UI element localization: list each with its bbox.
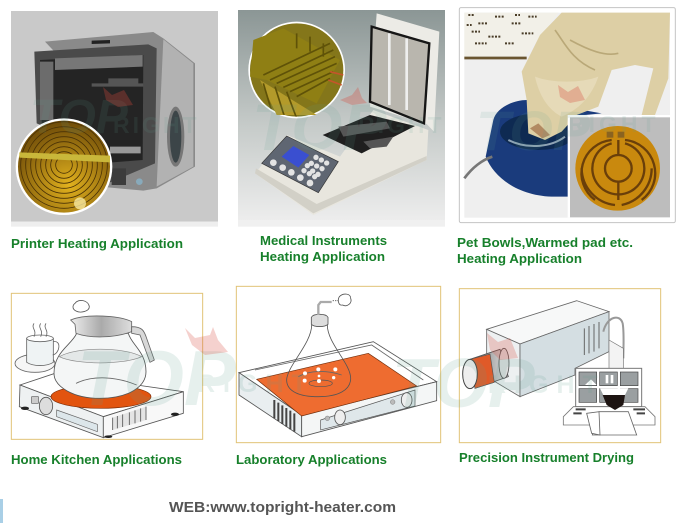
icon: flexible heater inset [248, 22, 345, 118]
panel: laboratory illustration [236, 286, 441, 443]
heading: printer caption: Printer Heating Application [11, 236, 183, 251]
icon: snowy ledge [464, 13, 558, 59]
icon: glass kettle [54, 300, 154, 398]
watermark: top row: TOP [476, 99, 591, 162]
icon: round heater inset [568, 115, 670, 218]
panel: precision instrument illustration [459, 289, 661, 443]
watermark: bottom row [77, 327, 606, 422]
icon: round heater inset [16, 118, 112, 215]
icon: orange heating pad [51, 385, 151, 408]
heading: laboratory caption: Laboratory Applications [236, 452, 387, 467]
watermark: bottom row: TOP [77, 334, 237, 422]
heading: medical caption: Heating Application [260, 249, 385, 264]
icon: operator [587, 388, 637, 435]
icon: open lid [370, 13, 439, 132]
icon: hot plate [19, 373, 183, 438]
icon: keypad display [262, 136, 338, 193]
heading: medical caption: Medical Instruments [260, 233, 387, 248]
icon: dog [522, 13, 670, 140]
watermark: bottom row: TOP [392, 344, 535, 422]
corner mark [0, 499, 3, 523]
panel: home kitchen illustration [11, 293, 203, 439]
panel: pet bowl photo [459, 8, 675, 223]
heading: precision caption: Precision Instrument Drying [459, 450, 634, 465]
watermark: top row: TOP [252, 90, 387, 164]
heading: pet bowl caption: Heating Application [457, 251, 582, 266]
heading: medical caption [260, 233, 387, 264]
heading: kitchen caption: Home Kitchen Applications [11, 452, 182, 467]
heading: pet bowl caption [457, 235, 633, 266]
panel: medical instrument photo [238, 10, 445, 227]
heading: pet bowl caption: Pet Bowls,Warmed pad etc. [457, 235, 633, 250]
icon: heated cylinder [463, 348, 509, 389]
icon: hot plate base [239, 342, 437, 437]
watermark: top row [30, 85, 660, 164]
icon: instrument base [255, 110, 428, 215]
website address: WEB:www.topright-heater.com [169, 500, 396, 516]
icon: 3D printer [34, 32, 195, 191]
watermark: top row: RIGHT [358, 112, 445, 138]
icon: blue bowl [464, 100, 602, 197]
watermark: bottom row: RIGHT [197, 370, 315, 398]
icon: coffee cup [15, 323, 59, 372]
icon: orange heating pad [257, 353, 417, 416]
icon: operator console [563, 368, 655, 425]
icon: drying oven [487, 301, 624, 397]
watermark: top row: RIGHT [113, 112, 200, 138]
watermark: top row: TOP [30, 91, 129, 144]
panel: printer heating photo [11, 11, 218, 227]
watermark: bottom row: RIGHT [488, 371, 606, 399]
watermark: top row: RIGHT [568, 111, 660, 137]
icon: flask with steam [287, 294, 351, 397]
